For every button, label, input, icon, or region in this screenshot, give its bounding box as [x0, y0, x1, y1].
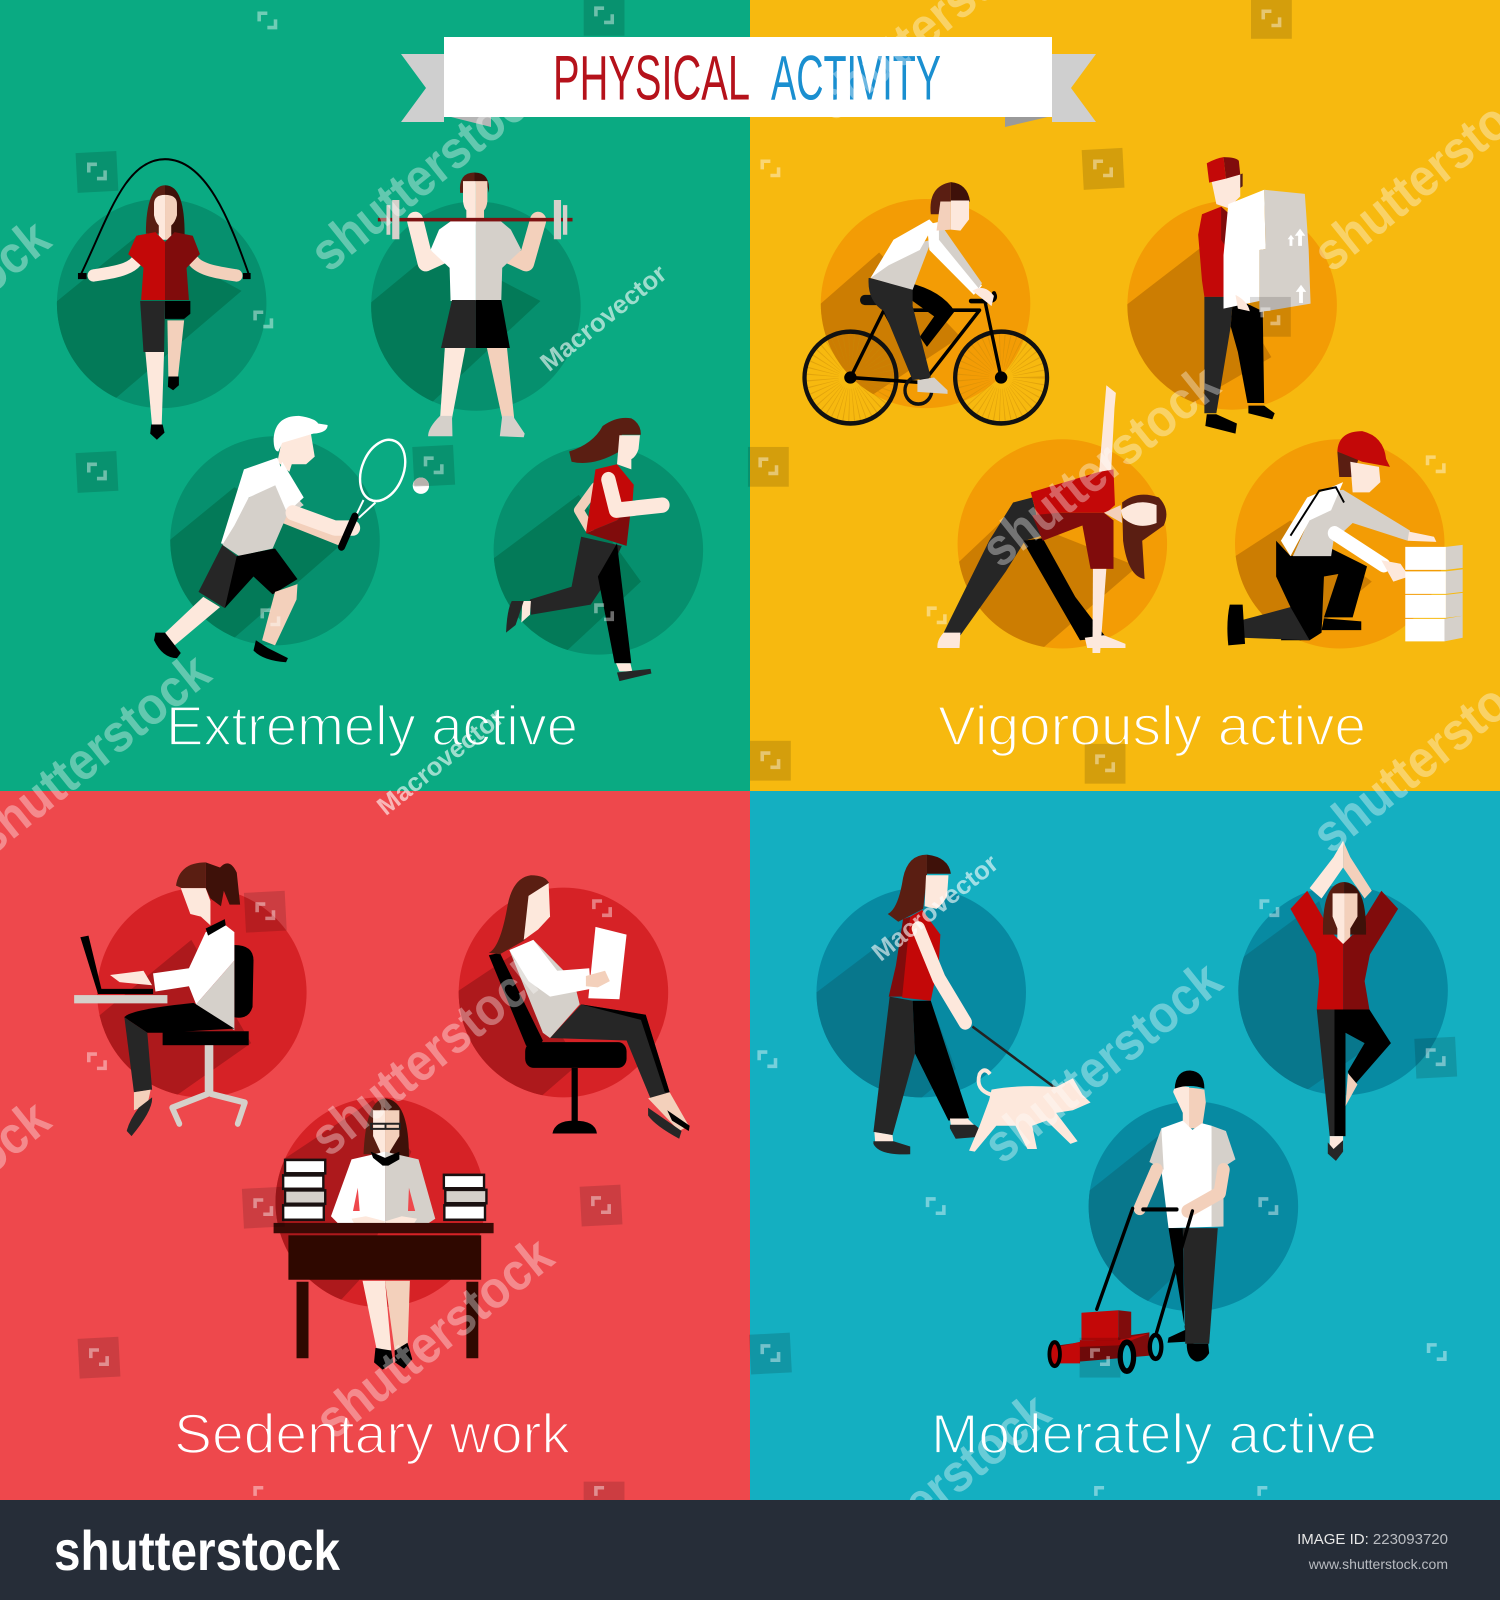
- label: vigorously active: Vigorously active: [938, 694, 1366, 757]
- figure: man lifting barbell: [364, 172, 581, 437]
- watermark wordmarks: shutterstock: [299, 943, 559, 1168]
- panel: vigorously active: [750, 0, 1500, 791]
- watermark wordmarks: shutterstock: [304, 1225, 565, 1450]
- figure: man stacking boxes: [1224, 431, 1463, 658]
- figure: woman in tree pose: [1228, 841, 1448, 1161]
- figure: man cycling: [805, 182, 1047, 423]
- watermark wordmarks: Macrovector: [372, 703, 509, 821]
- figures: extremely active group: [48, 159, 703, 681]
- watermark wordmarks: shutterstock: [973, 950, 1233, 1175]
- footer bar: [0, 1500, 1500, 1600]
- watermark wordmarks: Macrovector: [867, 849, 1004, 967]
- title text: physical: PHYSICAL: [553, 44, 750, 114]
- panel: sedentary work: [0, 791, 750, 1500]
- title ribbon: [401, 37, 1096, 127]
- figure: woman stretching: [937, 385, 1167, 658]
- figures: vigorously active group: [805, 157, 1463, 658]
- label: sedentary work: Sedentary work: [174, 1402, 571, 1465]
- watermark wordmarks: shutterstock: [971, 354, 1231, 579]
- figure: woman running: [483, 418, 703, 681]
- footer url: www.shutterstock.com: [1308, 1556, 1448, 1572]
- figure: woman at laptop: [74, 862, 307, 1136]
- figure: man mowing lawn: [1049, 1071, 1298, 1371]
- watermark wordmarks: shutterstock: [801, 1381, 1061, 1600]
- figure: woman at desk: [268, 1097, 494, 1370]
- panel: moderately active: [750, 791, 1500, 1500]
- title text: activity: ACTIVITY: [771, 44, 941, 114]
- footer image id: IMAGE ID: 223093720: [1297, 1531, 1448, 1548]
- figure: woman jumping rope: [48, 159, 266, 440]
- label: moderately active: Moderately active: [931, 1402, 1377, 1465]
- figures: moderately active group: [807, 841, 1448, 1371]
- figures: sedentary work group: [74, 862, 690, 1370]
- figure: woman walking dog: [807, 855, 1091, 1154]
- label: extremely active: Extremely active: [166, 694, 578, 757]
- figure: man carrying boxes: [1118, 157, 1337, 434]
- watermark wordmarks: Macrovector: [535, 260, 672, 377]
- watermark wordmarks: shutterstock: [299, 58, 559, 283]
- figure: woman reading: [450, 875, 690, 1139]
- footer logo: shutterstock: [54, 1519, 341, 1582]
- figure: man playing tennis: [154, 416, 429, 662]
- panel: extremely active: [0, 0, 750, 791]
